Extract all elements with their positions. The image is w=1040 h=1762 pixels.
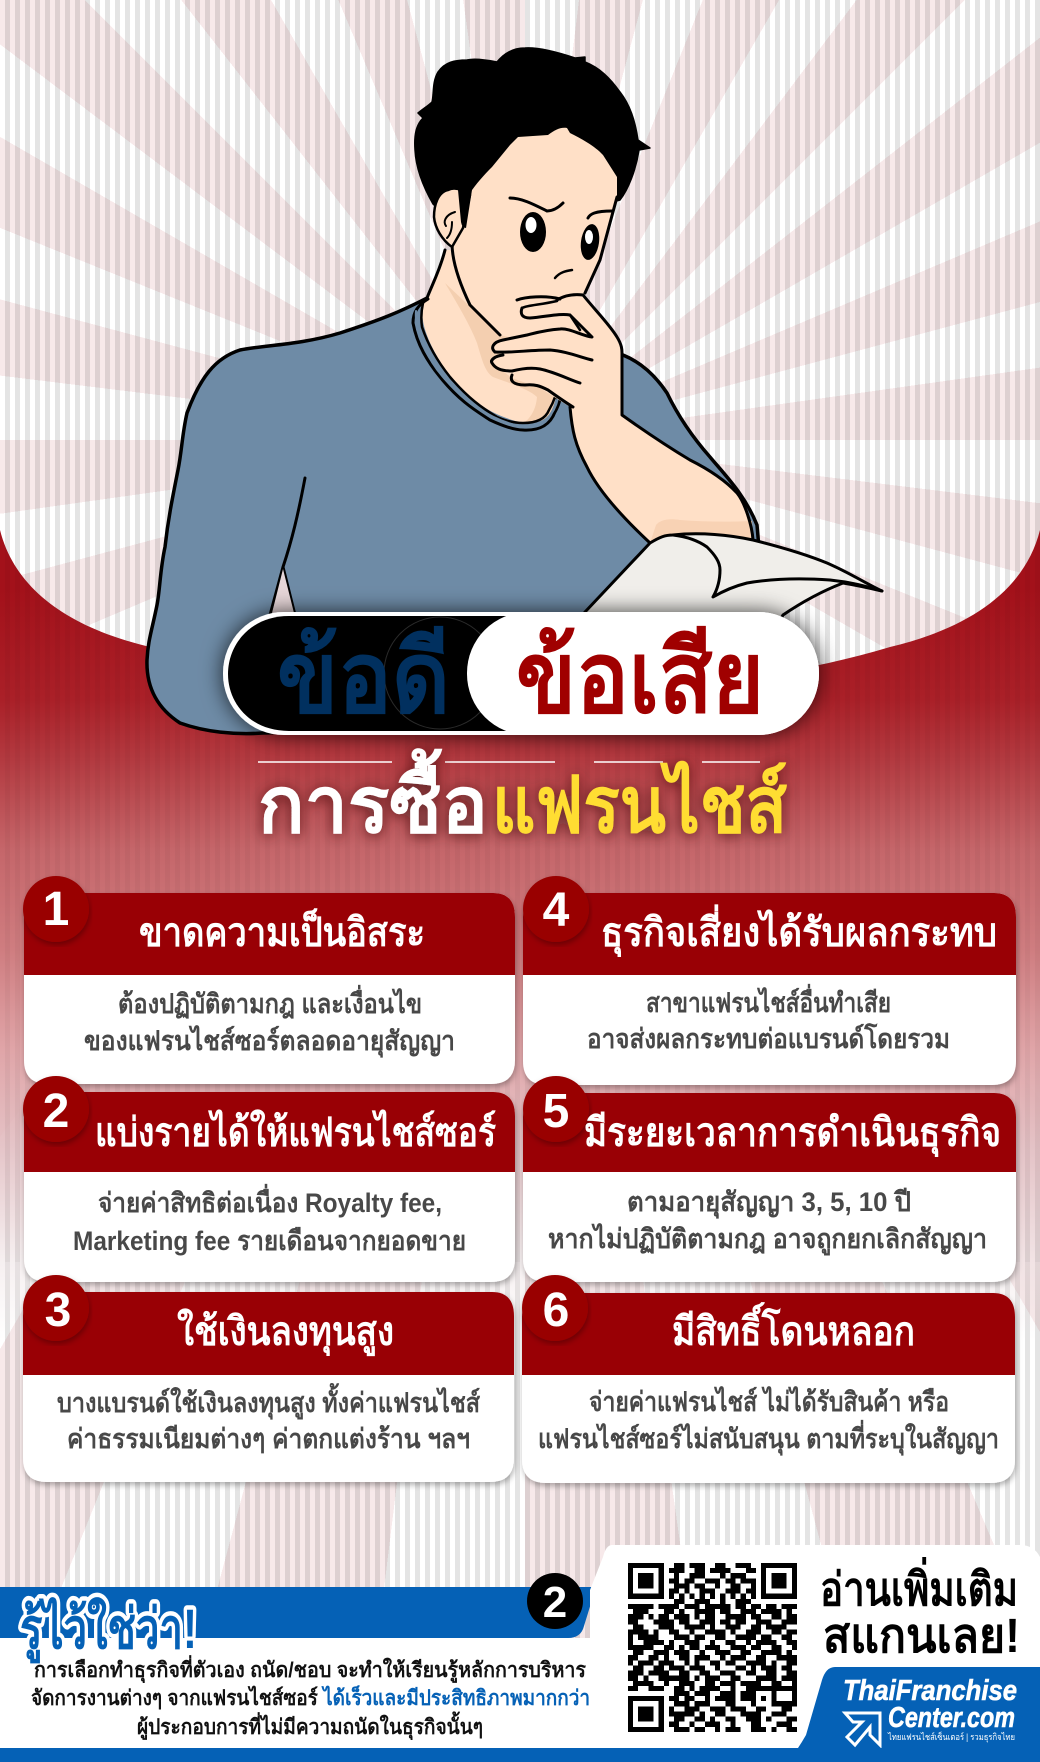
footer: blue base strip [0, 1748, 1040, 1762]
card 2: 2 [43, 1085, 69, 1138]
card 6: 6 [543, 1284, 569, 1337]
title [258, 748, 787, 849]
title: แฟรนไชส์ [492, 760, 787, 849]
book [530, 534, 882, 690]
pill base with shadow [223, 612, 819, 735]
card 1: ขาดความเป็นอิสระ [139, 907, 425, 955]
card 3: ค่าธรรมเนียมต่างๆ ค่าตกแต่งร้าน ฯลฯ [67, 1424, 470, 1454]
scan text [820, 1557, 1020, 1663]
background: red gradient lower area [0, 530, 1040, 1298]
hair [415, 48, 650, 240]
card 4 [523, 876, 1016, 1085]
card 5 [523, 1076, 1016, 1282]
card 1: 1 [43, 883, 69, 936]
card 1 [23, 876, 515, 1084]
QR code [628, 1566, 797, 1729]
card 6 [522, 1275, 1015, 1483]
card 4: อาจส่งผลกระทบต่อแบรนด์โดยรวม [587, 1022, 950, 1054]
card 5: ตามอายุสัญญา 3, 5, 10 ปี [627, 1187, 911, 1219]
neck and collar [413, 250, 561, 430]
body text: ผู้ประกอบการที่ไม่มีความถนัดในธุรกิจนั้นๆ [137, 1711, 483, 1741]
card 4: สาขาแฟรนไชส์อื่นทำเสีย [646, 983, 891, 1018]
pros segment: ข้อดี [277, 622, 450, 734]
illustration: thinking man reading [147, 48, 882, 734]
card 5: หากไม่ปฏิบัติตามกฎ อาจถูกยกเลิกสัญญา [548, 1223, 987, 1256]
pill: pros and cons toggle [223, 612, 819, 735]
body text [31, 1654, 590, 1741]
card 1: ต้องปฏิบัติตามกฎ และเงื่อนไข [118, 984, 422, 1019]
logo: ThaiFranchise Center: ไทยแฟรนไชส์เซ็นเตอร์ | รวมธุรกิจไทย [887, 1730, 1015, 1743]
card 3: ใช้เงินลงทุนสูง [177, 1308, 394, 1357]
black badge 2 [527, 1573, 583, 1629]
card 6: มีสิทธิ์โดนหลอก [672, 1302, 915, 1354]
card 3: 3 [45, 1284, 71, 1337]
body text: จัดการงานต่างๆ จากแฟรนไชส์ซอร์ ได้เร็วและมีประสิทธิภาพมากกว่า [31, 1684, 590, 1710]
card 2: จ่ายค่าสิทธิต่อเนื่อง Royalty fee, [98, 1183, 442, 1218]
title: การซื้อ [258, 748, 488, 849]
card 4: ธุรกิจเสี่ยงได้รับผลกระทบ [601, 904, 997, 958]
card 3 [23, 1275, 514, 1482]
cons segment: ข้อเสีย [516, 622, 764, 734]
card 3: บางแบรนด์ใช้เงินลงทุนสูง ทั้งค่าแฟรนไชส์ [57, 1382, 480, 1420]
card 6: จ่ายค่าแฟรนไชส์ ไม่ได้รับสินค้า หรือ [589, 1386, 949, 1417]
card 2: Marketing fee รายเดือนจากยอดขาย [73, 1226, 466, 1256]
card 4: 4 [543, 884, 570, 937]
card 2 [23, 1076, 515, 1282]
shirt [147, 298, 760, 734]
face [434, 128, 617, 335]
logo: ThaiFranchise Center [798, 1667, 1040, 1748]
scan text: สแกนเลย! [823, 1610, 1020, 1663]
footer: QR panel [590, 1545, 1040, 1748]
pros segment [228, 616, 520, 734]
black badge 2: 2 [543, 1578, 567, 1627]
card 2: แบ่งรายได้ให้แฟรนไชส์ซอร์ [95, 1109, 496, 1155]
heading: รู้ไว้ใช่ว่า! [20, 1596, 197, 1664]
card 5: 5 [543, 1085, 569, 1138]
footer: did you know panel [0, 1573, 640, 1748]
card 1: ของแฟรนไชส์ซอร์ตลอดอายุสัญญา [84, 1025, 455, 1058]
blue band [0, 1587, 596, 1638]
logo: ThaiFranchise Center: ThaiFranchise [843, 1675, 1017, 1707]
arm and hand [492, 295, 753, 545]
body text: การเลือกทำธุรกิจที่ตัวเอง ถนัด/ชอบ จะทำให้เรียนรู้หลักการบริหาร [34, 1654, 587, 1684]
